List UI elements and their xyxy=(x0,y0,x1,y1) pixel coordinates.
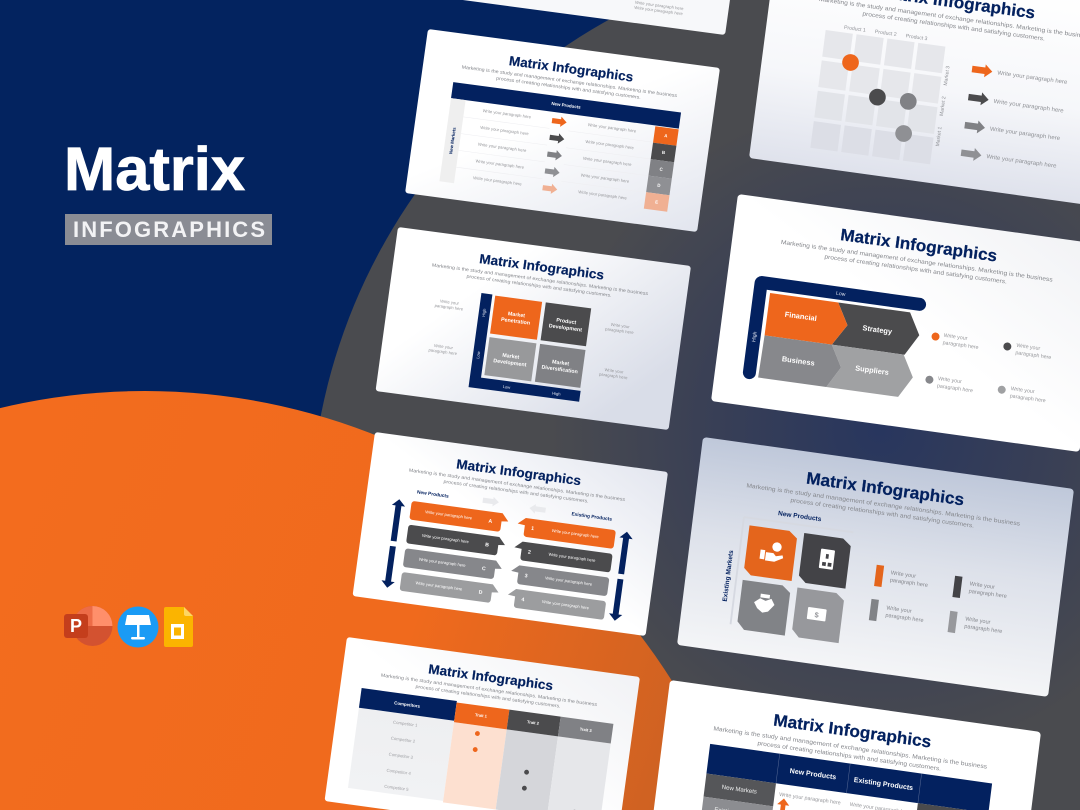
legend swatches and text: Write your xyxy=(965,616,991,626)
table columns xyxy=(348,708,611,810)
slide text: paragraph lines: Write your paragraph here xyxy=(635,0,684,11)
axis labels: Market 2 xyxy=(939,96,947,116)
legend swatches and text: Write your xyxy=(886,605,912,615)
letter badges: A xyxy=(664,133,669,139)
navy L axis: High xyxy=(481,308,487,317)
slide description: process of creating relationships with and satisfying customers. xyxy=(862,11,1046,43)
row dividers and text: Write your paragraph here xyxy=(580,172,630,184)
side paragraph labels: paragraph here xyxy=(428,347,458,356)
right vertical arrows xyxy=(608,531,634,622)
quadrant: Product Development xyxy=(541,302,591,346)
slide description: Marketing is the study and management of exchange relationships. Marketing is the business xyxy=(381,673,598,707)
background: lower right dark fill xyxy=(700,300,1080,810)
legend swatches and text xyxy=(869,565,1008,640)
row dividers and text: Write your paragraph here xyxy=(585,139,635,150)
letter badges xyxy=(644,126,679,212)
legend arrows and text: Write your paragraph here xyxy=(990,126,1060,142)
left vertical arrows xyxy=(381,498,406,589)
quadrant: Market Diversification: Diversification xyxy=(541,365,578,375)
right bars: 1 xyxy=(531,526,535,532)
slide text: paragraph lines xyxy=(634,0,684,16)
cell text: Write your paragraph here xyxy=(779,792,841,806)
row labels: Competitor 4 xyxy=(386,768,412,776)
axis labels xyxy=(831,25,955,147)
arrows column xyxy=(542,115,567,195)
quadrant: Market Development: Development xyxy=(493,358,527,369)
icon: Keynote xyxy=(118,606,158,648)
slide description: process of creating relationships with and satisfying customers. xyxy=(790,498,975,530)
slide description xyxy=(431,262,649,303)
row dividers and text: Write your paragraph here xyxy=(482,108,532,120)
heading: New Products: New Products xyxy=(778,510,822,523)
row dividers and text: Write your paragraph here xyxy=(473,175,523,187)
legend dots and text: Write your xyxy=(943,333,968,342)
slide description: Marketing is the study and management of exchange relationships. Marketing is the business xyxy=(409,468,626,502)
icon: Google Slides xyxy=(164,607,193,647)
legend arrows and text: Write your paragraph here xyxy=(986,154,1057,170)
slide description xyxy=(460,64,678,105)
right bars: Write your paragraph here xyxy=(548,552,596,563)
right bars: Write your paragraph here xyxy=(545,575,593,587)
slide: product market table xyxy=(644,680,1041,810)
slide description: Marketing is the study and management of exchange relationships. Marketing is the business xyxy=(432,262,649,296)
slide description: process of creating relationships with and satisfying customers. xyxy=(443,479,589,504)
slide title: Matrix Infographics xyxy=(427,661,554,693)
chevron: Strategy: Strategy xyxy=(862,323,894,336)
subtitle badge: INFOGRAPHICS: INFOGRAPHICS xyxy=(73,217,265,242)
heading: Existing Markets: Existing Markets xyxy=(722,549,735,602)
chevron: Strategy xyxy=(832,302,922,356)
legend dots and text: Write your xyxy=(938,376,962,385)
table header: Competitors xyxy=(394,700,421,709)
slide title: Matrix Infographics xyxy=(839,225,998,266)
slide: icon tiles xyxy=(677,437,1074,697)
axis labels: Market 3 xyxy=(943,65,951,86)
right bars: Write your paragraph here xyxy=(542,599,590,610)
table dots xyxy=(466,731,586,810)
table header: Existing Products xyxy=(853,777,914,792)
legend dots and text: paragraph here xyxy=(1015,350,1052,361)
chevron: Financial xyxy=(765,293,850,346)
quadrant: Market Development: Market xyxy=(502,353,520,361)
right bars xyxy=(506,517,616,620)
slide description xyxy=(380,673,598,714)
slide: top sliver xyxy=(433,0,748,35)
left bars: B xyxy=(485,542,490,549)
row labels: Competitor 5 xyxy=(384,784,410,792)
letter badges: C xyxy=(659,167,664,172)
slide description: Marketing is the study and management of exchange relationships. Marketing is the business xyxy=(713,726,987,771)
legend arrows and text: Write your paragraph here xyxy=(997,70,1068,86)
row dividers and text: Write your paragraph here xyxy=(478,142,527,153)
row label: New Markets: New Markets xyxy=(721,785,757,796)
side paragraph labels: Write your xyxy=(604,367,624,375)
right bars: 3 xyxy=(524,573,528,580)
left bars: Write your paragraph here xyxy=(415,580,463,592)
letter badges: E xyxy=(655,199,658,205)
faint axis arrows xyxy=(731,517,853,640)
letter badges: B xyxy=(662,150,665,155)
slide description xyxy=(817,0,1080,49)
slide description: process of creating relationships with and satisfying customers. xyxy=(496,76,641,100)
legend swatches and text: paragraph here xyxy=(885,613,924,624)
slide description: process of creating relationships with and satisfying customers. xyxy=(824,254,1008,286)
side column: New Markets xyxy=(439,98,466,183)
slide description: process of creating relationships with and satisfying customers. xyxy=(757,741,942,773)
header band: New Products xyxy=(451,82,681,129)
tile: document chart xyxy=(798,533,852,589)
row dividers and text: Write your paragraph here xyxy=(480,125,530,136)
slide description: Marketing is the study and management of exchange relationships. Marketing is the business xyxy=(461,64,678,98)
slide title: Matrix Infographics xyxy=(772,711,932,751)
slide title: Matrix Infographics xyxy=(508,53,634,85)
legend dots and text: Write your xyxy=(1010,386,1035,395)
side paragraph labels: paragraph here xyxy=(605,326,635,335)
slide description: Marketing is the study and management of exchange relationships. Marketing is the business xyxy=(746,483,1020,528)
left bars: Write your paragraph here xyxy=(425,509,473,521)
row dividers and text: Write your paragraph here xyxy=(583,156,632,167)
tile: banknote: $ xyxy=(814,610,820,620)
quadrant: Product Development: Product xyxy=(556,318,577,326)
legend swatches and text: paragraph here xyxy=(889,578,928,589)
quadrant: Market Penetration: Market xyxy=(508,311,526,319)
left bars: C xyxy=(482,566,486,572)
axis labels: Product 1 xyxy=(844,25,866,34)
slide title: Matrix Infographics xyxy=(478,251,605,283)
slide description: process of creating relationships with and satisfying customers. xyxy=(466,274,612,298)
title: Matrix: Matrix xyxy=(64,135,245,203)
legend swatches and text: Write your xyxy=(969,581,995,591)
legend swatches and text: paragraph here xyxy=(968,589,1007,600)
cell text xyxy=(779,792,912,810)
heading: Existing Products: Existing Products xyxy=(571,511,613,523)
slide title: Matrix Infographics xyxy=(805,469,965,509)
navy axis: Low xyxy=(836,291,846,298)
row labels: Competitor 2 xyxy=(391,736,416,744)
legend dots and text: paragraph here xyxy=(1009,393,1046,404)
side paragraph labels: Write your xyxy=(434,343,454,350)
background: orange circle xyxy=(0,391,769,810)
tile: handshake xyxy=(737,580,791,636)
navy axis xyxy=(742,275,927,402)
chevron: Business xyxy=(758,335,844,389)
slide description xyxy=(779,240,1053,292)
table header xyxy=(359,688,614,744)
right bars: 2 xyxy=(527,550,531,556)
legend dots and text: paragraph here xyxy=(942,340,979,351)
quadrant: Market Diversification: Market xyxy=(552,359,570,368)
row labels xyxy=(384,720,418,792)
axis labels: Market 1 xyxy=(935,126,944,147)
navy L axis: Low xyxy=(503,384,511,390)
slide: quadrant matrix xyxy=(376,227,691,430)
chevron: Business: Business xyxy=(781,354,815,368)
legend arrows and text xyxy=(960,63,1068,172)
side paragraph labels: Write your xyxy=(610,322,631,329)
right bars: Write your paragraph here xyxy=(551,528,600,539)
row dividers and text: Write your paragraph here xyxy=(475,158,525,170)
slide description xyxy=(712,726,987,779)
row labels: Competitor 3 xyxy=(388,752,414,760)
background: dark gray circle xyxy=(310,0,1080,810)
navy L axis: Low xyxy=(475,351,481,359)
grid dots xyxy=(833,53,922,143)
navy L axis: High xyxy=(552,391,561,397)
side column: New Markets: New Markets xyxy=(448,126,457,154)
faint direction arrows xyxy=(482,495,546,515)
slide title: Matrix Infographics xyxy=(455,456,582,488)
table header: Trait 1 xyxy=(475,712,488,719)
heading: New Products: New Products xyxy=(417,489,449,500)
table header xyxy=(706,744,992,810)
quadrant: Market Development xyxy=(484,337,536,381)
grid cells xyxy=(810,30,945,164)
axis labels: Product 3 xyxy=(905,33,928,42)
slide description xyxy=(408,468,626,509)
left bars xyxy=(400,501,509,604)
quadrant: Product Development: Development xyxy=(548,323,582,334)
quadrant: Market Penetration: Penetration xyxy=(501,317,530,327)
table header: Trait 2 xyxy=(527,719,540,726)
chevron: Suppliers xyxy=(826,345,916,399)
quadrant: Market Diversification xyxy=(535,344,586,388)
side paragraph labels xyxy=(428,298,635,380)
chevron: Suppliers: Suppliers xyxy=(855,363,889,377)
slide description: process of creating relationships with and satisfying customers. xyxy=(415,684,561,709)
left bars: D xyxy=(478,590,483,596)
quadrant: Market Penetration xyxy=(490,296,542,340)
icon: PowerPoint xyxy=(64,606,112,646)
row labels: Competitor 1 xyxy=(393,720,418,728)
row label: Existing Markets xyxy=(701,797,773,810)
legend dots and text: paragraph here xyxy=(937,383,973,394)
row label: New Markets xyxy=(704,773,776,806)
left bars: Write your paragraph here xyxy=(418,557,467,568)
side paragraph labels: paragraph here xyxy=(434,303,464,312)
slide description xyxy=(745,483,1020,536)
icon: PowerPoint: P xyxy=(70,616,82,636)
row dividers and text: Write your paragraph here xyxy=(587,122,637,134)
legend swatches and text: Write your xyxy=(890,570,916,580)
legend dots and text: Write your xyxy=(1016,343,1041,352)
slide description: Marketing is the study and management of exchange relationships. Marketing is the business xyxy=(780,240,1053,284)
row dividers and text: Write your paragraph here xyxy=(578,189,628,201)
side paragraph labels: paragraph here xyxy=(599,372,628,380)
header band: New Products: New Products xyxy=(551,101,581,110)
row dividers and text xyxy=(455,106,655,203)
navy axis: High xyxy=(751,331,759,342)
side paragraph labels: Write your xyxy=(440,298,460,306)
slide text: paragraph lines: Write your paragraph here xyxy=(634,5,684,16)
letter badges: D xyxy=(657,183,661,188)
left bars: Write your paragraph here xyxy=(422,533,470,544)
chevron: Financial: Financial xyxy=(784,310,817,323)
navy L axis xyxy=(469,293,592,402)
tile: banknote xyxy=(791,588,845,643)
left bars: A xyxy=(488,519,493,525)
table header: Trait 3 xyxy=(579,726,593,733)
last column block xyxy=(915,803,988,810)
axis labels: Product 2 xyxy=(875,29,897,38)
slide: dot matrix grid xyxy=(749,0,1080,209)
right bars: 4 xyxy=(521,597,525,603)
slide: speech bars xyxy=(352,432,668,636)
slide: chevrons xyxy=(711,194,1080,452)
legend arrows and text: Write your paragraph here xyxy=(993,99,1064,115)
slide: competitor table xyxy=(324,637,640,810)
table header: New Products xyxy=(789,768,837,781)
slide: table with arrows xyxy=(405,29,720,232)
tile: hand with coin xyxy=(743,525,798,581)
legend swatches and text: paragraph here xyxy=(964,624,1003,635)
icon: orange up arrow xyxy=(776,798,790,810)
legend dots and text xyxy=(924,331,1053,404)
